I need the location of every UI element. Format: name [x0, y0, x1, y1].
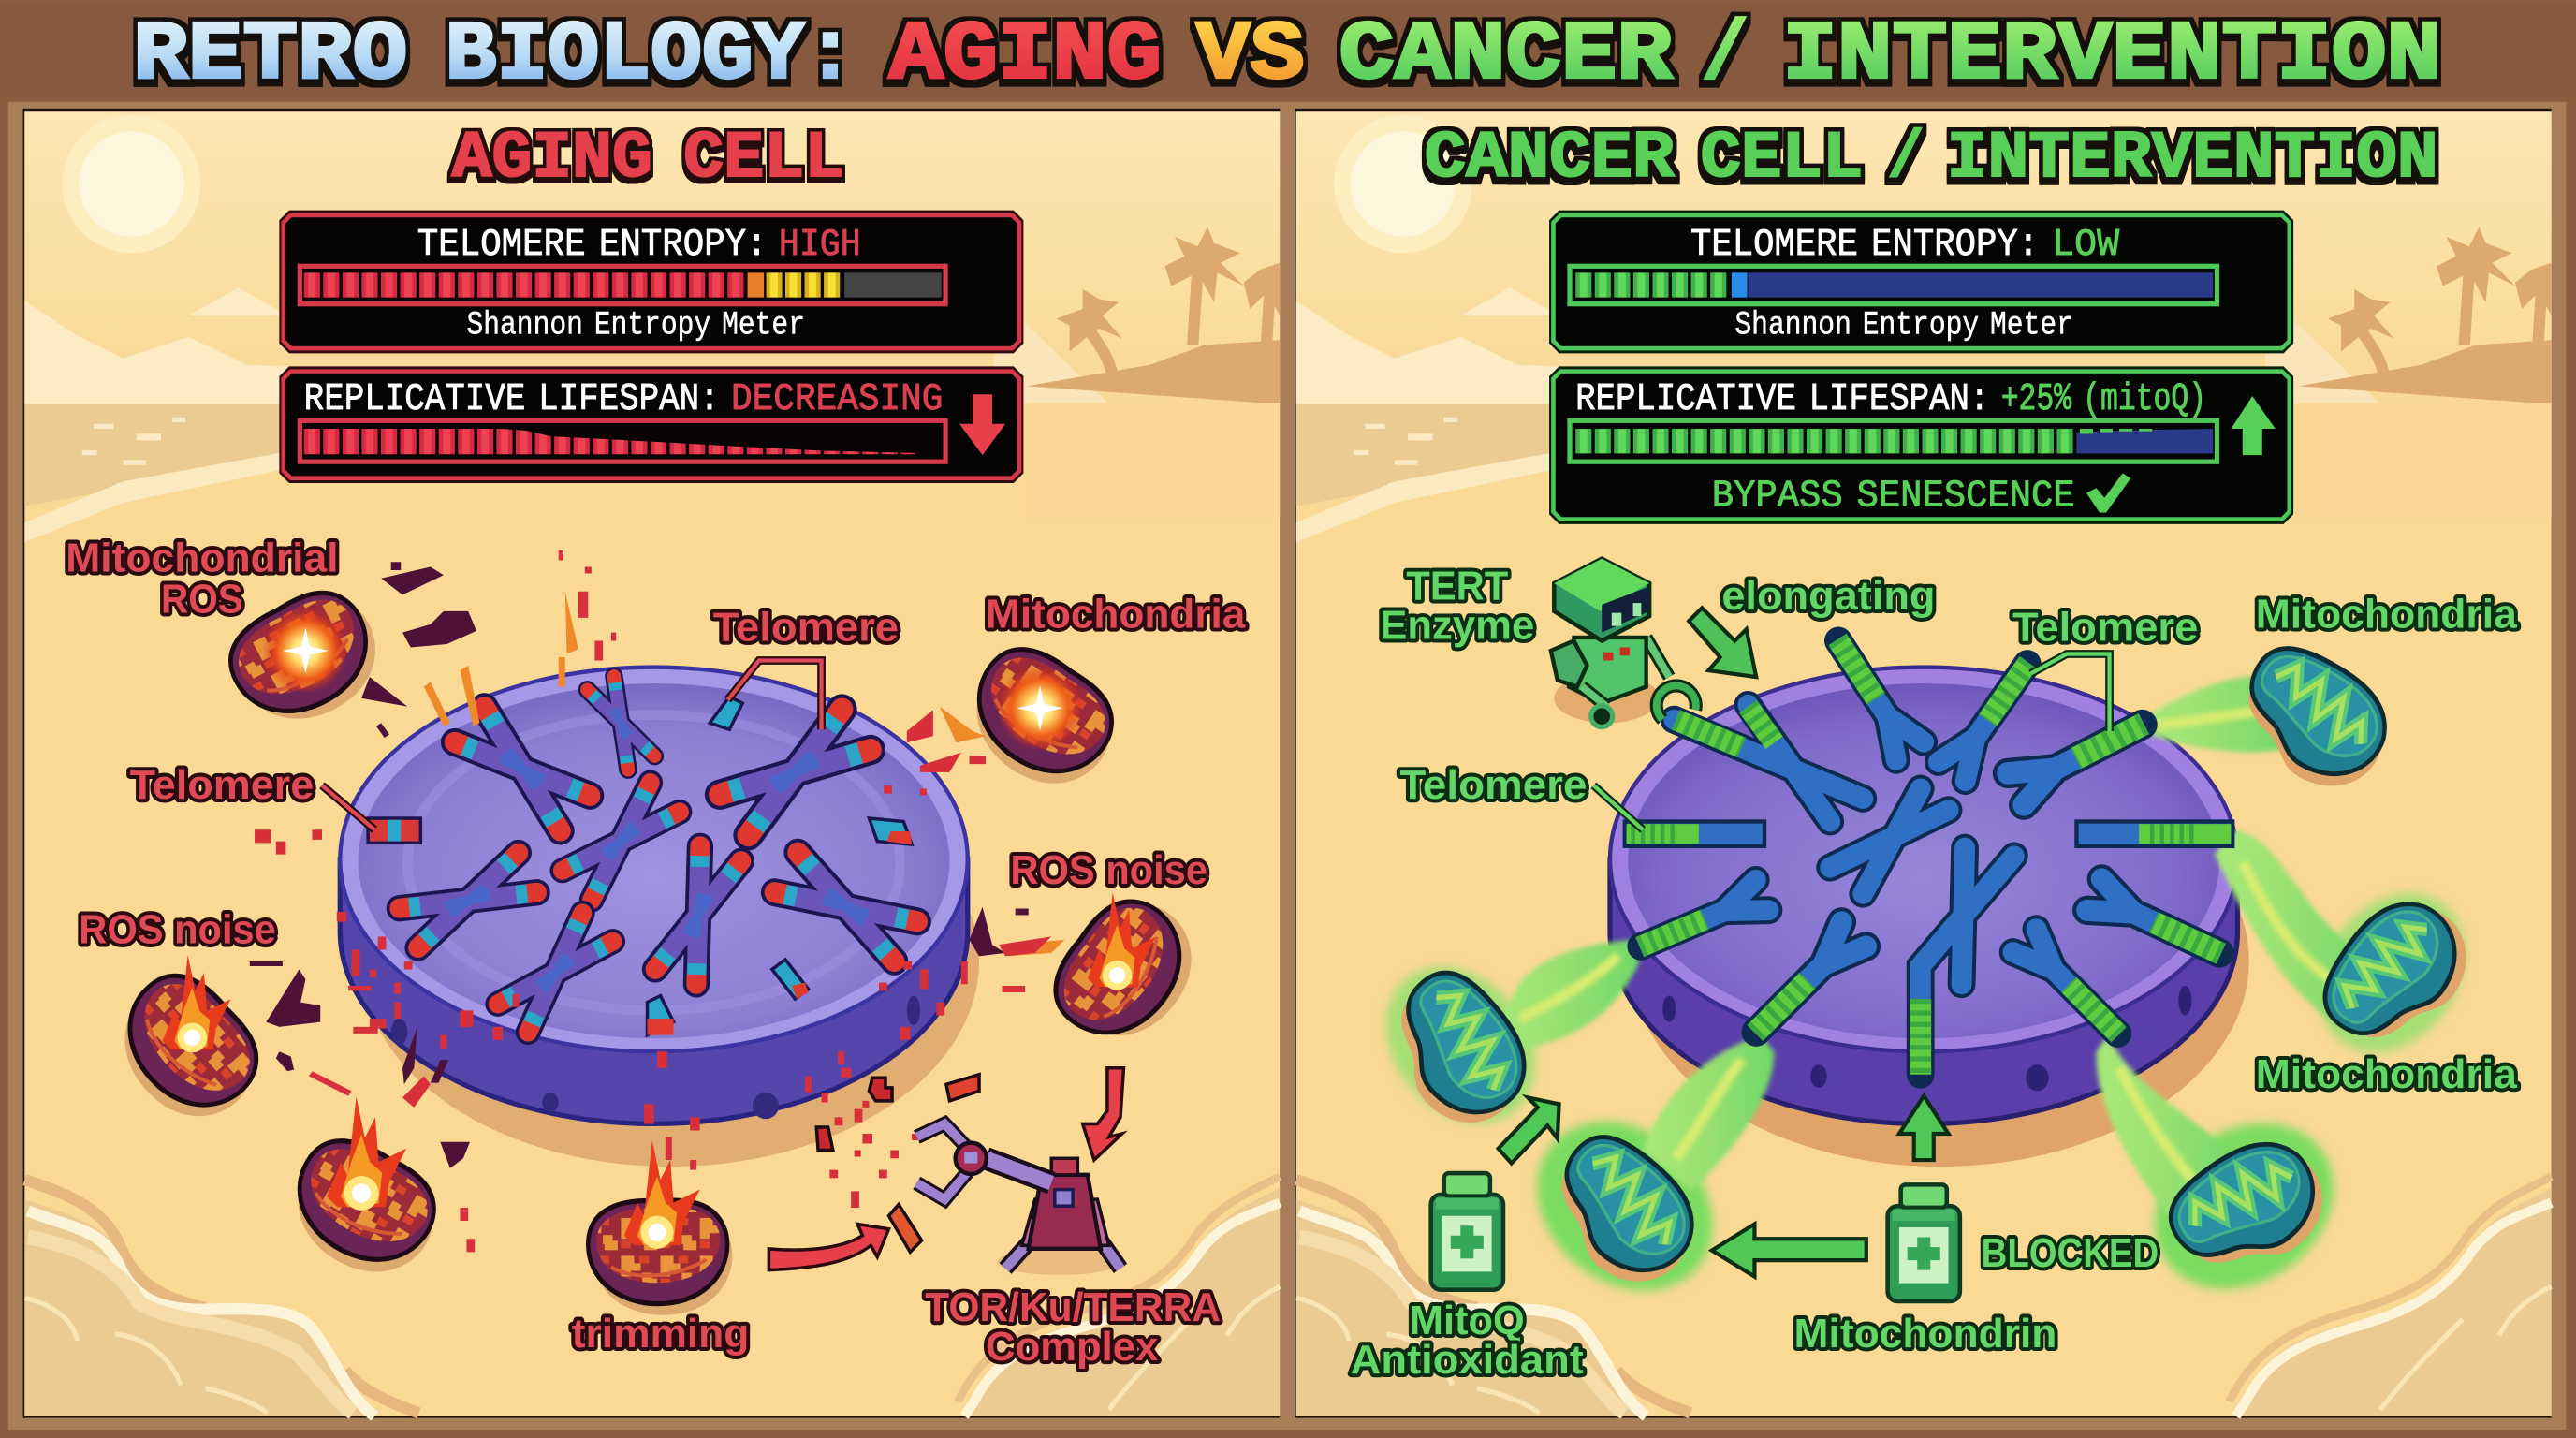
- green arrow left to mitochondrion: [1712, 1224, 1866, 1277]
- label: trimming: trimming: [572, 1311, 749, 1357]
- entropy meter panel green: [1549, 211, 2293, 353]
- red arrow down to complex: [1083, 1068, 1123, 1160]
- left panel border: [23, 109, 1280, 1418]
- label: mitoq antioxidant: [1351, 1298, 1584, 1383]
- label: tert enzyme: Enzyme: [1380, 603, 1534, 649]
- title word: cancer: CANCER: [1339, 9, 1673, 102]
- label: tert enzyme: [1380, 564, 1534, 649]
- label: telomere left: Telomere: [1399, 762, 1587, 808]
- cell disc: [340, 668, 979, 1167]
- label: mitochondria lower: Mitochondria: [2256, 1051, 2517, 1097]
- entropy bar green: [1570, 266, 2217, 304]
- lifespan meter panel green: [1549, 366, 2293, 524]
- entropy meter panel: [279, 211, 1023, 353]
- lifespan label: REPLICATIVE LIFESPAN:: [304, 378, 720, 421]
- chromosomes: [400, 676, 917, 1033]
- right panel scenery background: [1296, 111, 2552, 1416]
- panel: cancer cell intervention: [1295, 109, 2552, 1418]
- bypass senescence: BYPASS SENESCENCE: [1712, 476, 2075, 519]
- arrow up: [2231, 396, 2276, 455]
- label: tor ku terra complex: Complex: [986, 1324, 1159, 1370]
- entropy meter label: TELOMERE ENTROPY:: [417, 224, 768, 267]
- lifespan value: +25% (mitoQ): [2001, 378, 2206, 421]
- green arrow up to cell: [1899, 1096, 1949, 1160]
- tert enzyme robot: [1551, 559, 1696, 727]
- heading: cancer cell intervention: CELL: [1701, 123, 1863, 197]
- red arrow to debris: [768, 1224, 889, 1270]
- heading: cancer cell intervention: CANCER: [1425, 123, 1675, 197]
- horizontal telomere left: [1625, 822, 1764, 846]
- label: ros noise left: ROS noise: [79, 906, 276, 952]
- label: mitochondrial ros: ROS: [161, 577, 243, 623]
- long bottom chromosome: [1921, 848, 2014, 1075]
- entropy meter label: TELOMERE ENTROPY:: [1690, 224, 2039, 267]
- label: tert enzyme: TERT: [1406, 564, 1508, 609]
- title slash: /: [1702, 9, 1748, 102]
- title: [133, 9, 2441, 102]
- mitochondria healthy: [1366, 633, 2488, 1304]
- shannon caption: Shannon Entropy Meter: [466, 306, 805, 344]
- label: tor ku terra complex: [925, 1284, 1221, 1370]
- label: mitochondrial ros: Mitochondrial: [66, 536, 339, 581]
- heading: cancer cell intervention: /: [1888, 123, 1924, 197]
- label: blocked: BLOCKED: [1982, 1230, 2159, 1276]
- bottle: mitochondrin: [1888, 1184, 1960, 1301]
- label: mitochondrial ros: [66, 536, 339, 623]
- lifespan meter panel: [279, 366, 1023, 483]
- label: elongating: elongating: [1721, 573, 1936, 619]
- right panel border: [1295, 109, 2552, 1418]
- heading: aging cell: CELL: [683, 123, 844, 197]
- heading: cancer cell intervention: [1425, 123, 2438, 197]
- center x chromosome: [1830, 788, 1949, 894]
- leader lines: [322, 661, 822, 829]
- mitochondria glow halos: [1355, 865, 2495, 1325]
- entropy value low: LOW: [2052, 224, 2120, 267]
- label: mitoq antioxidant: Antioxidant: [1351, 1337, 1584, 1383]
- title band: [0, 5, 2576, 97]
- horizontal telomere right: [2076, 822, 2232, 846]
- label: tor ku terra complex: TOR/Ku/TERRA: [925, 1284, 1221, 1330]
- cell disc green side: [1610, 668, 2249, 1167]
- heading: cancer cell intervention: INTERVENTION: [1947, 123, 2438, 197]
- mitochondria aging: [95, 575, 1217, 1315]
- entropy value high: HIGH: [779, 224, 861, 267]
- heading: aging cell: AGING: [452, 123, 652, 197]
- lifespan value decreasing: DECREASING: [731, 378, 943, 421]
- tor ku terra robot arm: [916, 1123, 1122, 1275]
- chromosomes intervention: [1625, 630, 2232, 1075]
- title word: aging: AGING: [889, 9, 1162, 102]
- label: mitoq antioxidant: MitoQ: [1410, 1298, 1525, 1343]
- lifespan label: REPLICATIVE LIFESPAN:: [1575, 378, 1989, 421]
- shannon caption: Shannon Entropy Meter: [1734, 306, 2073, 344]
- bottle: mitoq: [1431, 1173, 1503, 1290]
- label: telomere top: Telomere: [713, 604, 899, 650]
- entropy bar: [300, 266, 945, 304]
- label: telomere left: Telomere: [130, 762, 314, 808]
- label: mitochondria top: Mitochondria: [2256, 591, 2517, 637]
- upper left x chromosome: [1674, 705, 1863, 822]
- title word: biology: BIOLOGY:: [446, 9, 856, 102]
- title word: vs: VS: [1196, 9, 1305, 102]
- lifespan bar green: [1570, 420, 2217, 462]
- telomere fragments: [368, 697, 912, 1035]
- leader line color green: [1593, 654, 2110, 829]
- title word: intervention: INTERVENTION: [1782, 9, 2441, 102]
- ros debris: [250, 550, 1064, 1252]
- label: telomere top: Telomere: [2012, 604, 2198, 650]
- lifespan bar: [300, 420, 945, 462]
- left panel scenery background: [24, 111, 1280, 1416]
- label: mitochondria: Mitochondria: [986, 591, 1246, 637]
- panel: aging cell: [23, 109, 1280, 1418]
- green arrow up right to mitochondrion: [1499, 1097, 1559, 1164]
- check mark: [2086, 473, 2130, 513]
- label: ros noise right: ROS noise: [1010, 847, 1208, 893]
- arrow down: [959, 394, 1005, 455]
- label: mitochondrin: Mitochondrin: [1794, 1311, 2056, 1357]
- leader line color: [322, 661, 822, 829]
- leader lines green: [1593, 654, 2110, 829]
- heading: aging cell: [452, 123, 844, 197]
- green arrow elongating: [1689, 608, 1756, 677]
- title word: retro: RETRO: [133, 9, 407, 102]
- green plumes: [1486, 676, 2374, 1240]
